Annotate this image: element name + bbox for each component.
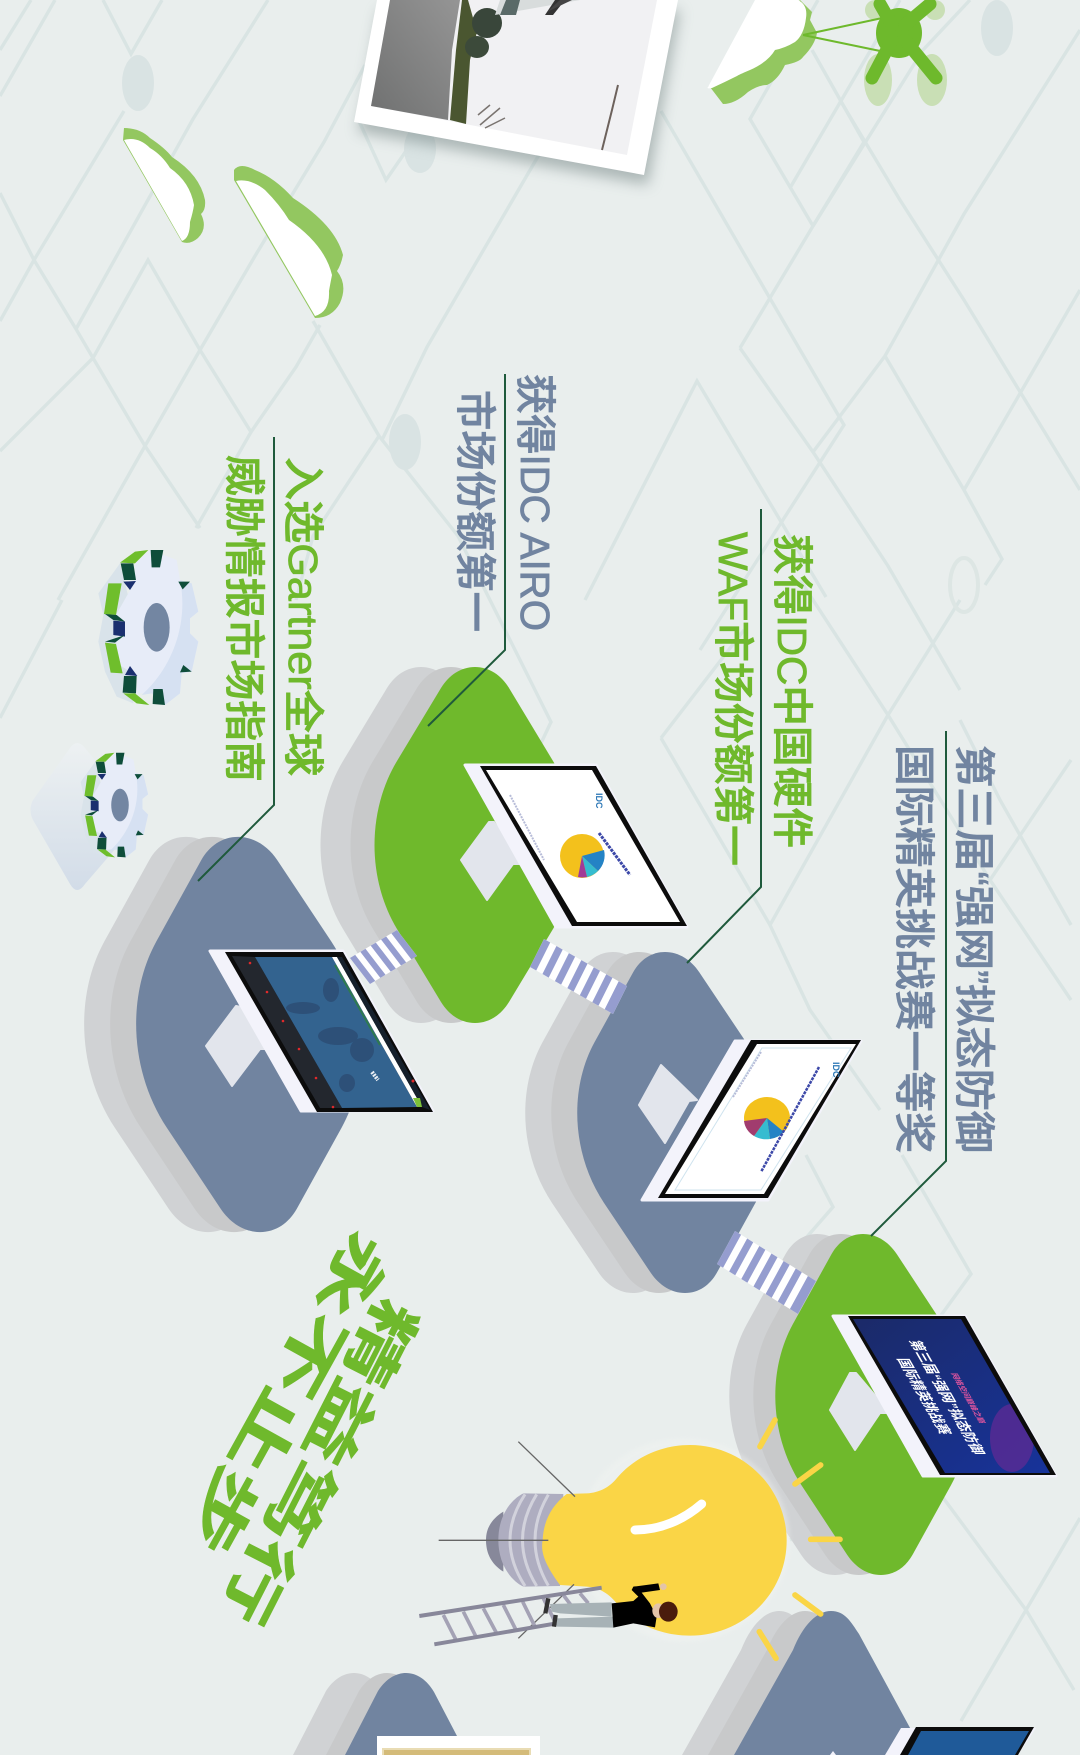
label: competition — [871, 731, 997, 1236]
label: idc waf — [687, 509, 815, 963]
leader line airo — [428, 374, 505, 726]
platform idc waf — [516, 952, 782, 1293]
stairs one — [350, 930, 417, 984]
gear small — [81, 753, 148, 857]
monitor idc airo report — [461, 765, 687, 927]
stairs two — [530, 939, 627, 1014]
leader line waf — [687, 509, 761, 963]
icon: drone — [803, 0, 947, 106]
platform bottom left — [293, 1673, 468, 1755]
label: idc airo: 市场份额第一 — [452, 390, 498, 632]
certificate bottom left — [377, 1736, 540, 1755]
platform competition — [721, 1234, 977, 1575]
monitor competition poster: 国际精英挑战赛 — [893, 1358, 955, 1434]
label: gartner — [198, 437, 326, 881]
leader line competition — [871, 731, 946, 1236]
person on ladder — [545, 1583, 678, 1628]
title: 永不止步 — [173, 1221, 402, 1564]
platform gartner — [73, 837, 373, 1232]
label: idc airo: 获得IDC AIRO — [512, 374, 558, 631]
icon: light bulb — [419, 1420, 840, 1658]
gear large — [98, 550, 198, 705]
ladder — [419, 1588, 602, 1644]
platform bottom right — [682, 1611, 925, 1755]
title: 精益笃行 — [210, 1288, 429, 1635]
label: idc airo — [428, 374, 558, 726]
leader line gartner — [198, 437, 274, 881]
stairs three — [717, 1231, 816, 1314]
bulb rays — [759, 1420, 840, 1658]
monitor competition poster: 网络空间巅峰之巅 — [949, 1373, 988, 1423]
label: idc waf: 获得IDC中国硬件 — [769, 534, 815, 848]
cloud: drone load — [708, 0, 817, 104]
photo frame — [354, 0, 680, 185]
monitor gartner map — [206, 951, 433, 1112]
monitor idc airo report: IDC — [594, 793, 604, 809]
label: gartner: 威胁情报市场指南 — [221, 455, 267, 782]
tile behind small gear — [30, 743, 138, 890]
monitor idc waf report — [639, 1040, 861, 1200]
monitor competition poster: 第三届“强网”拟态防御 — [905, 1340, 989, 1455]
monitor competition poster — [830, 1316, 1056, 1476]
cloud: large left — [234, 166, 343, 318]
label: idc waf: WAF市场份额第一 — [710, 532, 756, 866]
label: gartner: 入选Gartner全球 — [280, 457, 326, 776]
label: competition: 国际精英挑战赛一等奖 — [891, 745, 937, 1153]
cloud: small left — [123, 128, 205, 243]
decorative ovals — [122, 0, 1013, 612]
platform idc airo — [320, 667, 576, 1023]
label: competition: 第三届“强网”拟态防御 — [951, 745, 997, 1153]
monitor idc waf report: IDC — [831, 1062, 841, 1078]
monitor bottom right — [830, 1727, 1036, 1755]
